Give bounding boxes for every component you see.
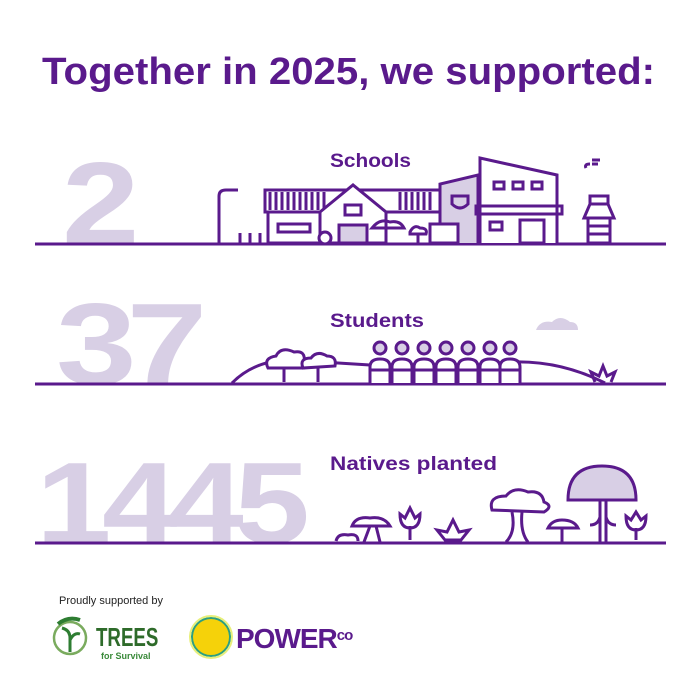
illustration: students on hills <box>232 318 615 383</box>
big number: 1445: 1445 <box>36 438 306 568</box>
big number: 37: 37 <box>56 279 202 409</box>
logo: Powerco <box>190 616 353 658</box>
label: Schools: Schools <box>330 151 411 172</box>
title: Together in 2025, we supported: <box>42 51 655 93</box>
credit text: Proudly supported by <box>59 595 163 607</box>
label: Natives planted: Natives planted <box>330 454 497 475</box>
logo: Trees for Survival: TREES <box>96 622 158 652</box>
illustration: native plants <box>336 466 646 542</box>
logo: Powerco: POWER <box>236 623 337 654</box>
ground lines <box>35 244 666 543</box>
logo: Trees for Survival: for Survival <box>101 651 151 661</box>
logo: Trees for Survival <box>54 619 158 661</box>
label: Students: Students <box>330 311 424 332</box>
big number: 2: 2 <box>62 139 139 268</box>
illustration: school buildings <box>219 158 614 244</box>
logo: Powerco: co <box>337 627 353 644</box>
